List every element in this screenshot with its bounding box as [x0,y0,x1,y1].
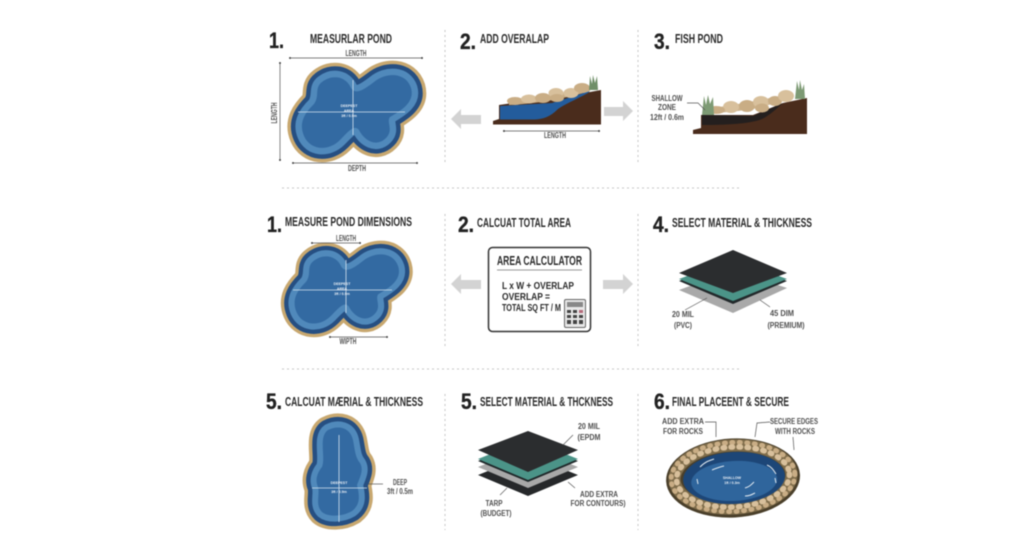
panel: measurlar pond [269,28,423,173]
pond diagram with length and width: 3ft / 0.9m [334,292,350,296]
heading: step 2 calcuat total area: CALCUAT TOTAL AREA [477,216,571,230]
layered liner stack: 45 DIM [770,309,794,318]
panel: fish pond [650,29,807,134]
heading: step 5 calcuat maerial and thickness: 5. [266,389,282,414]
area calculator card: AREA CALCULATOR [497,253,582,268]
heading: step 3 fish pond: 3. [654,29,670,54]
panel: select material and thickness budget [461,389,626,518]
heading: step 1 measure pond dimensions: 1. [267,212,282,237]
arrow: left [451,274,481,294]
heading: step 5 calcuat maerial and thickness: CALCUAT MÆRIAL & THICKNESS [285,395,423,409]
vertical pond diagram [312,427,413,522]
area calculator card: TOTAL SQ FT / M [502,302,561,314]
finished pond with rock edge: FOR ROCKS [663,427,704,436]
heading: step 3 fish pond: FISH POND [675,32,723,46]
heading: step 6 final placeent and secure [654,389,789,414]
panel: add overlap [451,29,633,140]
pond diagram with dimensions: 3ft / 0.9m [341,114,357,118]
layered liner stack: 20 MIL [672,310,694,319]
finished pond with rock edge: WITH ROCKS [775,427,816,436]
heading: step 4 select material and thickness [653,212,812,237]
heading: step 2 add overalap: ADD OVERALAP [480,32,549,46]
four layer liner stack: (EPDM [578,433,601,442]
layered liner stack: (PVC) [674,321,692,330]
cross section with water and rocks [493,75,601,140]
finished pond with rock edge: ADD EXTRA [662,417,704,426]
vertical pond diagram: DEEP [393,478,407,487]
icon: calculator [564,300,586,328]
heading: step 1 measurlar pond: MEASURLAR POND [310,32,392,46]
heading: step 1 measurlar pond [269,28,392,53]
pond diagram with dimensions: DEPTH [348,164,366,173]
finished pond with rock edge: SECURE EDGES [770,417,818,426]
cross section shallow zone: 12ft / 0.6m [650,113,684,122]
heading: step 5 select material and thckness [461,389,613,414]
heading: step 5 select material and thckness: SELECT MATERIAL & THCKNESS [480,395,613,409]
cross section shallow zone [650,80,807,134]
heading: step 5 select material and thckness: 5. [461,389,477,414]
arrow: right [603,274,633,294]
pond diagram with length and width: WIPTH [340,337,357,346]
finished pond with rock edge [662,417,818,521]
cross section shallow zone: SHALLOW [652,94,683,103]
panel: measure pond dimensions [267,212,412,346]
panel: calculate total area [451,212,633,332]
heading: step 4 select material and thickness: SELECT MATERIAL & THICKNESS [672,216,812,230]
vertical pond diagram: 3ft / 0.5m [387,487,413,496]
area calculator card: OVERLAP = [502,291,550,303]
four layer liner stack: TARP [486,499,503,508]
arrow: left [451,109,481,129]
heading: step 6 final placeent and secure: 6. [654,389,670,414]
vertical pond diagram: 3ft / 0.9m [331,490,347,494]
pond diagram with dimensions: AREA [344,109,354,113]
four layer liner stack: (BUDGET) [480,509,512,518]
heading: step 6 final placeent and secure: FINAL PLACEENT & SECURE [672,395,789,409]
pond diagram with dimensions [270,49,423,173]
heading: step 1 measure pond dimensions: MEASURE POND DIMENSIONS [285,215,412,229]
heading: step 2 calcuat total area: 2. [458,212,474,237]
pond diagram with dimensions: DEEPEST [341,104,358,108]
four layer liner stack: 20 MIL [578,422,600,431]
heading: step 3 fish pond [654,29,723,54]
finished pond with rock edge: 1ft / 0.3m [724,481,740,485]
four layer liner stack [478,422,626,518]
pond diagram with length and width: LENGTH [336,234,356,243]
heading: step 1 measurlar pond: 1. [269,28,284,53]
heading: step 2 add overalap [460,29,549,54]
heading: step 1 measure pond dimensions [267,212,412,237]
layered liner stack: (PREMIUM) [768,321,805,330]
pond diagram with dimensions: LENGTH [270,102,279,124]
heading: step 5 calcuat maerial and thickness [266,389,423,414]
finished pond with rock edge: SHALLOW [723,476,742,480]
heading: step 2 add overalap: 2. [460,29,476,54]
vertical pond diagram: DEEPEST [331,481,348,485]
arrow: right [604,101,633,121]
panel: calculate material and thickness [266,389,423,522]
heading: step 2 calcuat total area [458,212,571,237]
cross section shallow zone: ZONE [658,103,677,112]
pond diagram with dimensions: LENGTH [346,49,367,58]
layered liner stack [672,250,805,330]
cross section with water and rocks: LENGTH [544,131,566,140]
pond diagram with length and width [293,234,399,346]
four layer liner stack: ADD EXTRA [580,490,618,499]
area calculator card: L x W + OVERLAP [502,280,574,292]
panel: final placement and secure [654,389,818,521]
pond diagram with length and width: DEEPEST [334,282,351,286]
heading: step 4 select material and thickness: 4. [653,212,669,237]
area calculator card [488,248,590,332]
four layer liner stack: FOR CONTOURS) [570,499,626,508]
pond diagram with length and width: AREA [337,287,347,291]
panel: select material and thickness [653,212,812,330]
